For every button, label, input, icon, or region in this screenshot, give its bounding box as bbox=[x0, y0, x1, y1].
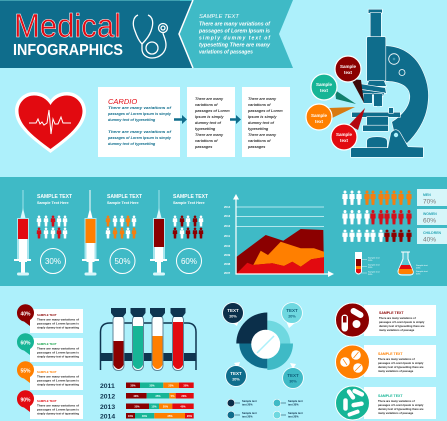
stacked bars by year: 20% bbox=[163, 404, 169, 408]
callout: sample text dark red bbox=[335, 56, 364, 103]
stat group 1: 30% bbox=[45, 257, 61, 266]
donut chart bbox=[236, 312, 293, 370]
icon: flask: 30% bbox=[416, 274, 420, 276]
area chart: 2007 bbox=[224, 271, 231, 275]
panel: text box 2: There are many bbox=[195, 97, 224, 101]
panel: cardio: dummy text of typesetting bbox=[108, 118, 156, 122]
panel: capsules red: SAMPLE TEXT bbox=[379, 311, 404, 315]
stacked bars by year: 35% bbox=[155, 394, 161, 398]
list item 90%: passages of Lorem Ipsum is bbox=[37, 408, 80, 412]
list item 55%: SAMPLE TEXT bbox=[37, 370, 57, 374]
panel: pills green: passages of Lorem Ipsum is simply bbox=[378, 403, 424, 407]
banner text: There are many variations of bbox=[199, 22, 271, 28]
stacked bars by year: 30% bbox=[130, 384, 136, 388]
panel: tablets orange: dummy text of typesetting there are bbox=[378, 365, 424, 369]
area chart: 2013 bbox=[224, 214, 231, 218]
callout: text 20% navy: TEXT bbox=[227, 308, 239, 313]
donut legend bbox=[227, 399, 303, 419]
arrow bbox=[230, 115, 241, 124]
stat group 1 bbox=[37, 194, 72, 274]
panel: text box 3 bbox=[242, 87, 290, 157]
panel: text box 2: variations of bbox=[195, 139, 218, 143]
list item 55%: There are many variations of bbox=[37, 374, 79, 378]
list item 40%: SAMPLE TEXT bbox=[37, 313, 57, 317]
donut legend: text 20% bbox=[242, 414, 253, 418]
panel: text box 2: Ipsum is simply bbox=[195, 115, 224, 119]
callout: text 20% teal dark bbox=[226, 362, 246, 386]
syringe 1 bbox=[14, 190, 31, 276]
donut legend: text 20% bbox=[242, 402, 253, 406]
list item 55%: passages of Lorem Ipsum is bbox=[37, 378, 80, 382]
stat group 2: SAMPLE TEXT bbox=[107, 194, 142, 200]
panel: text box 2: passages of Lorem bbox=[194, 109, 230, 113]
list item 60%: simply dummy text of typesetting bbox=[37, 354, 79, 358]
stacked bars by year: 20% bbox=[187, 414, 193, 418]
stacked bars by year: 2014 bbox=[100, 414, 115, 420]
stacked bars by year: 35% bbox=[134, 404, 140, 408]
stacked bars by year: 25% bbox=[168, 384, 174, 388]
callout: text 20% teal dark: TEXT bbox=[230, 371, 242, 376]
list item 60%: 60% bbox=[20, 340, 31, 346]
label: women: 60% bbox=[423, 218, 436, 224]
panel: cardio: passages of Lorem Ipsum is simply bbox=[107, 112, 172, 116]
people row: men bbox=[342, 191, 412, 205]
donut legend: text 30% bbox=[288, 402, 299, 406]
panel: statistics band bbox=[0, 177, 447, 286]
stacked bars by year: 35% bbox=[149, 384, 155, 388]
label: children bbox=[417, 228, 447, 244]
callout: sample text green bbox=[311, 74, 356, 104]
callout: text 20% light: TEXT bbox=[286, 308, 298, 313]
panel: pills green: dummy text of typesetting there are bbox=[378, 407, 424, 411]
people row: women bbox=[342, 210, 412, 224]
callout: sample text red: Sample bbox=[336, 132, 352, 137]
label: women bbox=[417, 209, 447, 225]
callout: text 30% teal: 30% bbox=[289, 380, 297, 384]
panel: tablets orange: passages of Lorem Ipsum is simply bbox=[378, 361, 424, 365]
callout: text 30% teal: TEXT bbox=[287, 373, 299, 378]
icon: blood test tube: 10% bbox=[368, 260, 372, 262]
stat group 2 bbox=[106, 194, 142, 274]
panel: text box 2: dummy text of bbox=[195, 121, 222, 125]
icon: microscope bbox=[351, 10, 428, 157]
callout: sample text red: text bbox=[340, 138, 348, 143]
stat group 1: Sample Text Here bbox=[37, 201, 69, 205]
stat group 3 bbox=[173, 194, 208, 274]
stacked bars by year: 40% bbox=[133, 394, 139, 398]
icon: blood test tube: Sample text bbox=[368, 264, 380, 266]
panel: tablets orange: many variations of passage bbox=[378, 369, 414, 373]
icon: blood test tube: 30% bbox=[368, 274, 372, 276]
banner text: typesetting There are many bbox=[199, 42, 270, 48]
panel: capsules red: many variations of passage bbox=[379, 328, 415, 332]
list item 40%: simply dummy text of typesetting bbox=[37, 326, 79, 330]
stat group 3: SAMPLE TEXT bbox=[173, 194, 208, 200]
icon: blood test tube: Sample text bbox=[368, 256, 380, 260]
area chart: 2010 bbox=[224, 244, 231, 248]
area chart: 2012 bbox=[224, 224, 231, 228]
list item 60%: There are many variations of bbox=[37, 346, 79, 350]
panel: cardio: dummy text of typesetting bbox=[108, 142, 156, 146]
donut legend: text 20% bbox=[288, 414, 299, 418]
title: Medical bbox=[14, 7, 121, 44]
stacked bars by year: 5% bbox=[171, 394, 175, 398]
icon: blood test tube bbox=[355, 252, 380, 276]
panel: text box 3: typesetting bbox=[248, 127, 269, 131]
area chart: 2011 bbox=[224, 234, 231, 238]
callout: sample text orange: text bbox=[315, 119, 323, 124]
donut legend: Sample text bbox=[242, 411, 257, 415]
panel: text box 2 bbox=[187, 87, 235, 157]
label: women: WOMEN bbox=[423, 212, 437, 216]
stacked bars by year: 40% bbox=[142, 414, 148, 418]
banner text: simply dummy text of bbox=[199, 36, 271, 42]
stacked bars by year: 2013 bbox=[100, 404, 115, 411]
panel: capsules red: passages of Lorem Ipsum is simply bbox=[379, 320, 425, 324]
panel: text box 3: variations of bbox=[248, 103, 271, 107]
panel: text box 2: There are many bbox=[195, 133, 224, 137]
list item 40%: passages of Lorem Ipsum is bbox=[37, 322, 80, 326]
stacked bars by year: 2011 bbox=[100, 383, 115, 390]
stat group 2: Sample Text Here bbox=[107, 201, 139, 205]
area chart: 2009 bbox=[224, 253, 231, 257]
icon: blood test tube: 20% bbox=[368, 267, 372, 269]
label: men bbox=[417, 189, 447, 206]
callout: text 20% navy: 20% bbox=[229, 314, 237, 318]
list item 40%: There are many variations of bbox=[37, 318, 79, 322]
donut legend: Sample text bbox=[288, 411, 303, 415]
list item 55%: simply dummy text of typesetting bbox=[37, 382, 79, 386]
stat group 3: 60% bbox=[181, 257, 197, 266]
stat group 2: 50% bbox=[114, 257, 131, 266]
stacked bars by year: 20% bbox=[181, 394, 187, 398]
callout: text 20% light bbox=[282, 303, 302, 328]
label: children: CHILDREN bbox=[423, 231, 442, 235]
icon: flask: 20% bbox=[416, 268, 420, 270]
callout: sample text green: Sample bbox=[316, 82, 332, 87]
panel: cardio: There are many variations of bbox=[108, 130, 172, 134]
banner text: passages of Lorem Ipsum is bbox=[198, 28, 270, 34]
panel: text box 3: There are many bbox=[248, 133, 277, 137]
list item 60% bbox=[17, 333, 83, 362]
icon: heart with pulse bbox=[15, 92, 86, 153]
stacked bars by year bbox=[100, 382, 194, 420]
panel: pills green bbox=[336, 386, 436, 420]
icon: flask bbox=[398, 252, 428, 276]
callout: sample text red bbox=[331, 108, 365, 150]
callout: text 20% light: 20% bbox=[288, 314, 296, 318]
icon: flask: Sample text bbox=[416, 270, 428, 273]
icon: blood test tube: Sample text bbox=[368, 270, 380, 274]
stacked bars by year: 15% bbox=[151, 404, 157, 408]
donut legend: Sample text bbox=[242, 399, 257, 403]
syringe 2 bbox=[82, 190, 99, 276]
list item 60%: passages of Lorem Ipsum is bbox=[37, 350, 80, 354]
list item 60%: SAMPLE TEXT bbox=[37, 342, 57, 346]
stat group 3: Sample Text Here bbox=[173, 201, 205, 205]
callout: sample text orange bbox=[306, 104, 355, 130]
header banner bbox=[0, 0, 293, 68]
list item 90% bbox=[17, 390, 83, 419]
panel: text box 3: passages of Lorem bbox=[247, 109, 283, 113]
list item 90%: SAMPLE TEXT bbox=[37, 399, 57, 403]
arrow bbox=[174, 115, 187, 124]
panel: capsules red: There are many variations of bbox=[379, 316, 416, 320]
banner text: SAMPLE TEXT bbox=[199, 14, 239, 20]
panel: tablets orange: There are many variations of bbox=[378, 357, 415, 361]
area chart: 2008 bbox=[224, 262, 231, 266]
list item 40% bbox=[17, 304, 83, 333]
list item 55%: 55% bbox=[20, 368, 31, 374]
panel: cardio: There are many variations of bbox=[108, 106, 172, 110]
stacked bars by year: 35% bbox=[167, 414, 173, 418]
icon: stethoscope bbox=[133, 15, 168, 58]
title bbox=[13, 7, 123, 59]
banner text bbox=[198, 14, 271, 56]
panel: cardio: passages of Lorem Ipsum is simply bbox=[107, 136, 172, 140]
panel: text box 3: variations of bbox=[248, 139, 271, 143]
area chart: 2014 bbox=[224, 205, 231, 209]
list item 90%: 90% bbox=[20, 398, 31, 404]
callout: sample text dark red: text bbox=[344, 70, 352, 75]
area chart bbox=[224, 194, 334, 277]
syringe 3 bbox=[150, 190, 167, 276]
callout: text 20% navy bbox=[223, 303, 243, 326]
callout: text 20% teal dark: 20% bbox=[232, 378, 240, 382]
list item 55% bbox=[17, 361, 83, 390]
panel: pills green: There are many variations of bbox=[378, 399, 415, 403]
list item 90%: There are many variations of bbox=[37, 404, 79, 408]
stacked bars by year: 2012 bbox=[100, 394, 115, 400]
stacked bars by year: 10% bbox=[128, 414, 134, 418]
panel: cardio: CARDIO bbox=[108, 97, 137, 106]
panel: text box 2: typesetting bbox=[195, 127, 216, 131]
callout: sample text green: text bbox=[320, 88, 328, 93]
people row: children bbox=[342, 230, 412, 242]
stacked bars by year: 40% bbox=[180, 404, 186, 408]
panel: text box 3: dummy text of bbox=[248, 121, 275, 125]
title: INFOGRAPHICS bbox=[13, 42, 123, 59]
stat group 1: SAMPLE TEXT bbox=[37, 194, 72, 200]
label: children: 40% bbox=[423, 236, 436, 244]
stacked bars by year: 30% bbox=[183, 384, 189, 388]
panel: text box 3: Ipsum is simply bbox=[248, 115, 277, 119]
test tube rack bbox=[100, 308, 196, 370]
label: men: 70% bbox=[423, 198, 436, 206]
panel: text box 3: There are many bbox=[248, 97, 277, 101]
icon: flask: Sample text bbox=[416, 264, 428, 267]
callout: sample text dark red: Sample bbox=[340, 64, 356, 69]
list item 40%: 40% bbox=[20, 312, 31, 318]
panel: cardio bbox=[98, 87, 180, 157]
panel: capsules red: dummy text of typesetting there are bbox=[379, 324, 425, 328]
callout: sample text orange: Sample bbox=[311, 113, 327, 118]
list item 90%: simply dummy text of typesetting bbox=[37, 412, 79, 416]
panel: text box 3: passages bbox=[247, 145, 265, 149]
banner text: variations of passages bbox=[199, 50, 253, 56]
panel: text box 2: passages bbox=[194, 145, 212, 149]
panel: pills green: SAMPLE TEXT bbox=[378, 394, 403, 398]
callout: text 30% teal bbox=[283, 363, 303, 388]
panel: capsules red bbox=[336, 303, 436, 337]
panel: text box 2: variations of bbox=[195, 103, 218, 107]
panel: pills green: many variations of passage bbox=[378, 411, 414, 415]
panel: tablets orange bbox=[336, 345, 436, 379]
label: men: MEN bbox=[423, 193, 431, 197]
panel: tablets orange: SAMPLE TEXT bbox=[378, 352, 403, 356]
donut legend: Sample text bbox=[288, 399, 303, 403]
